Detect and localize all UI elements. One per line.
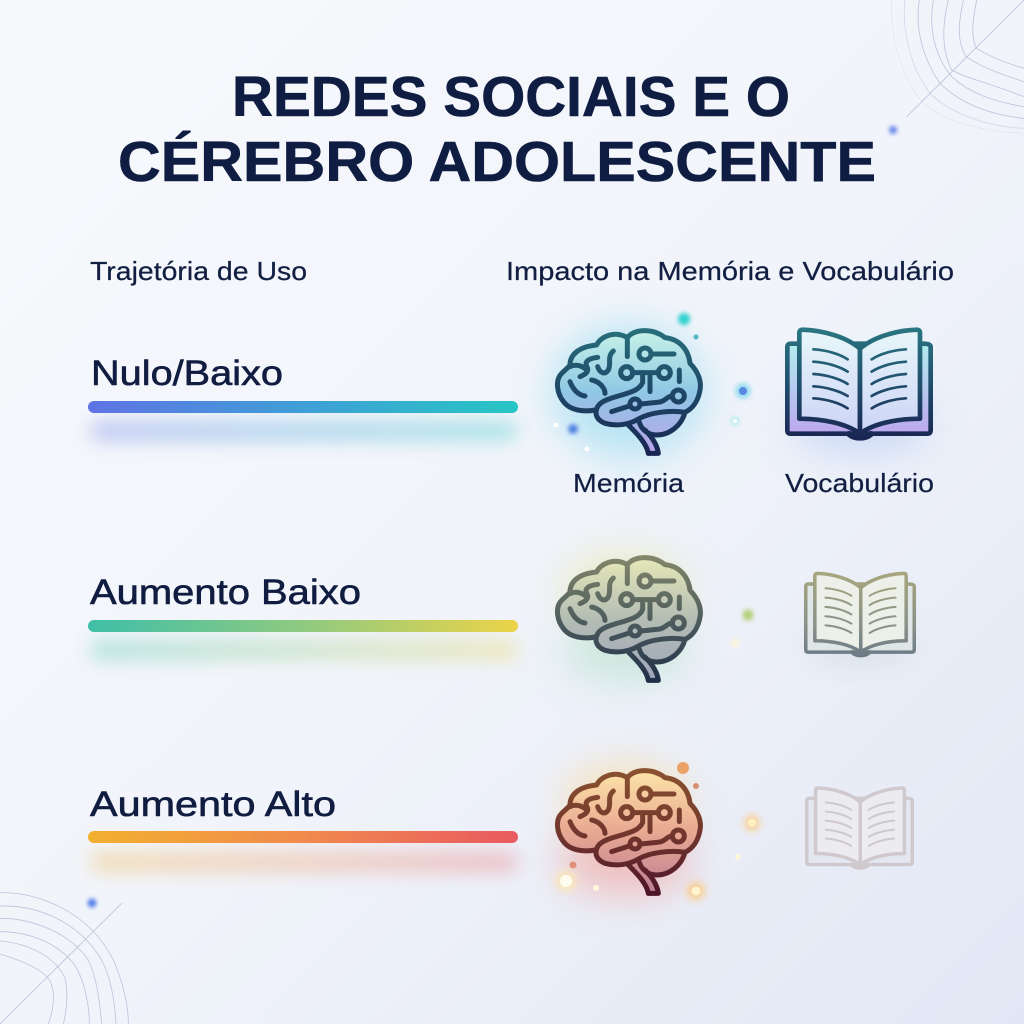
title: REDES SOCIAIS E O [232, 65, 790, 129]
row 3 brain icon: impaired memory [556, 762, 705, 900]
row 2 brain icon: reduced memory [557, 554, 700, 680]
row 3 trajectory: Aumento Alto: Aumento Alto [90, 785, 336, 824]
row 1 book icon: vocabulary [787, 330, 931, 451]
row 1 trajectory: Nulo/Baixo [88, 354, 518, 441]
label: Memória: Memória [573, 468, 685, 498]
row 3 floating particles [735, 815, 760, 860]
label: Vocabulário: Vocabulário [785, 468, 934, 498]
decorative corner lines: top right [891, 0, 1024, 133]
row 1 trajectory: Nulo/Baixo: Nulo/Baixo [91, 354, 283, 393]
decorative corner lines: bottom left [0, 893, 128, 1024]
column heading: usage trajectory: Trajetória de Uso [90, 256, 307, 286]
row 2 trajectory: Aumento Baixo [88, 573, 518, 660]
row 3 trajectory: Aumento Alto [88, 785, 518, 872]
decorative dot: top right [889, 126, 897, 134]
row 1 floating particles [730, 383, 751, 426]
row 2 book icon: faded vocabulary [806, 573, 914, 662]
row 2 trajectory: Aumento Baixo: Aumento Baixo [90, 573, 361, 612]
title: CÉREBRO ADOLESCENTE [118, 130, 876, 194]
decorative dot: bottom left [88, 898, 96, 908]
column heading: impact: Impacto na Memória e Vocabulário [506, 256, 954, 286]
row 2 floating particles [731, 610, 754, 647]
title [118, 65, 876, 194]
row 3 book icon: very faded vocabulary [807, 788, 912, 867]
row 1 brain icon: memory [552, 313, 704, 458]
